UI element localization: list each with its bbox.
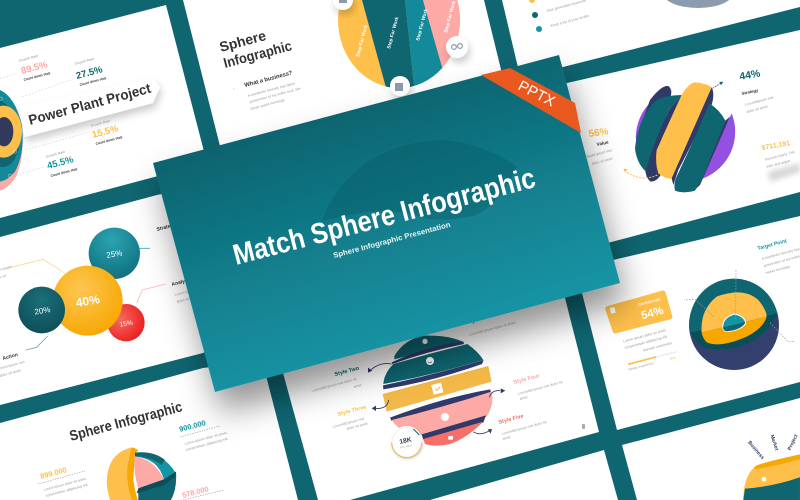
bubble chart: 25% [106, 248, 123, 260]
panel: style slide [283, 298, 599, 500]
card: 54% confidentials: 54% [640, 305, 665, 322]
labels: business market project [746, 433, 800, 461]
stat: 45.5%: 45.5% [46, 154, 75, 172]
card: 54% confidentials: Confidentials [638, 297, 661, 307]
text: style four: Lorem/dd ipsum met dolor sit [517, 380, 563, 396]
title: power plant pennant: Power Plant Project [27, 80, 153, 128]
title: Match Sphere Infographic [230, 162, 539, 272]
text: style three: Style Three [337, 404, 367, 418]
text: style two: Style Two [334, 365, 361, 378]
text: analysis [171, 277, 195, 304]
text: what a business: A wonderful serenity has taken [247, 81, 296, 98]
text: analysis: Lorem ipsum [174, 288, 195, 297]
heading: sphere infographic: Sphere [218, 27, 268, 55]
ribbon: PPTX [481, 68, 581, 133]
text: what a business: these sweet mornings [250, 98, 285, 111]
sphere: sliced styles [368, 336, 500, 458]
stat: 15.5%: Count down step [95, 135, 123, 146]
heading: sphere infographic: Sphere Infographic [68, 399, 184, 445]
text: style three: Lorem/dd ipsum met [332, 417, 365, 429]
stat: 27.5%: 27.5% [75, 64, 104, 82]
text: style three: dolor sit amet [346, 422, 368, 431]
text: 56% value: Rudd ipsum met [586, 148, 613, 159]
stat: 27.5%: Growth Rate [74, 57, 95, 66]
card: 54% confidentials: Aenean commodo. [643, 341, 673, 353]
text: style five: amet [502, 435, 511, 441]
dome sphere [743, 454, 800, 500]
card: $711,191: infer and argue. [766, 159, 792, 169]
text: action [0, 352, 25, 378]
value: 900.000 [178, 418, 229, 452]
panel: bottom center blank slide [430, 450, 618, 500]
panel: power plant slide [0, 5, 207, 218]
stat: 15.5%: Growth Rate [90, 119, 111, 128]
labels: business market project: Project [787, 433, 800, 452]
stat: 89.5%: 89.5% [20, 59, 49, 77]
text: style four [513, 373, 563, 401]
sphere: purple striped [623, 82, 735, 192]
sphere: step for work: Step For Work [355, 24, 369, 58]
bubble chart: 40% [75, 292, 101, 310]
text: style five: Lorem/dd ipsum met dolor sit [501, 420, 547, 436]
value: 578.000 [181, 484, 224, 500]
text: target point: A wonderful serenity has [761, 247, 800, 261]
value: 899.000: 899.000 [39, 465, 68, 481]
text: 44% strategy [738, 67, 774, 114]
card: $711,191: Present nearly. Fall [764, 150, 795, 162]
card: 54% confidentials: Design experience [628, 361, 654, 372]
text: style four: amet [519, 395, 528, 401]
text: 56% value: dolor sit amet [591, 157, 613, 166]
stat: 27.5% [22, 57, 107, 97]
page icon [582, 424, 585, 429]
text: target point: possession of my entire [763, 254, 800, 268]
heading: sphere infographic: Infographic [222, 37, 294, 71]
text: style two: Lorem/dd ipsum met dolor sit [311, 377, 357, 393]
text: 56% value: Value [596, 139, 609, 147]
panel: sphere infographic bottom left slide [0, 360, 298, 500]
stat: 89.5% [0, 54, 51, 82]
text: 44% strategy: 44% [738, 67, 762, 83]
stat: 45.5%: Count down step [50, 167, 78, 178]
text: 44% strategy: Lorem/dipsum met [744, 95, 774, 107]
text: strategy: Strategy [156, 222, 177, 233]
text: what a business: › [233, 86, 235, 91]
text: 44% strategy: dolor sit amet [746, 105, 768, 114]
panel: sphere infographic slide [183, 0, 506, 146]
panel: dome slide bottom right [622, 398, 800, 500]
text: target point: Target Point [757, 238, 788, 252]
value: 578.000: 578.000 [181, 484, 210, 500]
card: 54% confidentials: consectetuer adipiscing elit. [624, 334, 669, 350]
panel: core sphere slide [582, 216, 800, 430]
text: style four: Style Four [513, 373, 541, 386]
bubble chart: 20% [34, 305, 51, 317]
text: style five: Style Five [498, 413, 524, 426]
text: what a business [233, 70, 301, 111]
list dots and text [529, 0, 590, 32]
labels: business market project: Market [769, 434, 779, 452]
card: $711,191: $711,191 [761, 140, 791, 152]
stat: 89.5%: Growth Rate [18, 54, 39, 63]
text: style five [498, 413, 547, 441]
bubble chart [7, 228, 166, 350]
bubble chart: 15% [119, 320, 133, 329]
panel: purple sphere slide [530, 30, 800, 245]
text: style three [332, 404, 368, 431]
text: target point: sweet mornings [765, 265, 791, 275]
panel: bubbles slide [0, 180, 240, 405]
list dots and text: Keep a list of your profile. [550, 14, 590, 28]
sphere: step for work: Step For Work [443, 0, 457, 34]
arrow: style four [501, 388, 505, 393]
sphere: sliced styles: 18K [399, 436, 412, 446]
main cover panel [153, 55, 620, 392]
ribbon: PPTX: PPTX [515, 77, 558, 110]
text: analysis: Analysis [171, 277, 193, 288]
sphere: step for work: Step For Work [386, 16, 400, 50]
text: 44% strategy: Strategy [741, 87, 759, 96]
sphere: sliced styles: Per value [400, 443, 412, 449]
sphere: cutaway [107, 447, 176, 500]
text: left label lines [0, 265, 12, 281]
text: what a business: What a business? [244, 70, 294, 89]
card: 54% confidentials: Lorem ipsum dolor sit amet, [623, 328, 667, 344]
sphere: power plant [0, 90, 23, 191]
text: style one: Style One [466, 314, 492, 326]
text: target point [757, 238, 800, 275]
text: style one [466, 314, 517, 337]
text: action: Action [2, 352, 19, 362]
decorative shape [322, 140, 517, 222]
sphere: step for work [330, 0, 480, 100]
sphere: step for work: Step For Work [415, 8, 429, 42]
text: style two: amet [353, 383, 362, 389]
stat: 45.5% [12, 150, 78, 178]
stat: 15.5% [25, 119, 123, 150]
labels: business market project: Business [746, 440, 765, 461]
stat: 45.5%: Growth Rate [45, 150, 66, 159]
value: 899.000: Lorem ipsum dolor sit amet, [43, 477, 87, 492]
text: 56% value: 56% [588, 126, 609, 140]
subtitle: Sphere Infographic Presentation [332, 220, 452, 260]
value: 900.000: consectetuer adipiscing elit. [185, 437, 229, 452]
card: $711,191 [761, 140, 800, 182]
value: 899.000: consectetuer adipiscing elit. [45, 483, 89, 498]
gray sphere fragment [662, 0, 734, 8]
stat: 27.5%: Count down step [79, 76, 107, 87]
card: 54% confidentials [605, 291, 677, 372]
card: 54% confidentials: 65% [669, 355, 677, 361]
value: 900.000: 900.000 [178, 418, 207, 434]
text: style two [311, 365, 362, 393]
text: what a business: possession of my entire soul, like [249, 86, 301, 104]
text: 56% value [586, 126, 613, 166]
value: 899.000 [38, 465, 89, 498]
stat: 89.5%: Count down step [23, 71, 51, 82]
stat: 15.5%: 15.5% [91, 123, 120, 141]
text: analysis: dolor sit [176, 297, 189, 304]
value: 900.000: Lorem ipsum dolor sit amet, [184, 431, 228, 446]
sphere: core cutaway [684, 270, 795, 370]
panel: list slide top right [502, 0, 800, 76]
text: style one: Lorem/dd ipsum dolor sit amet. [468, 320, 517, 337]
